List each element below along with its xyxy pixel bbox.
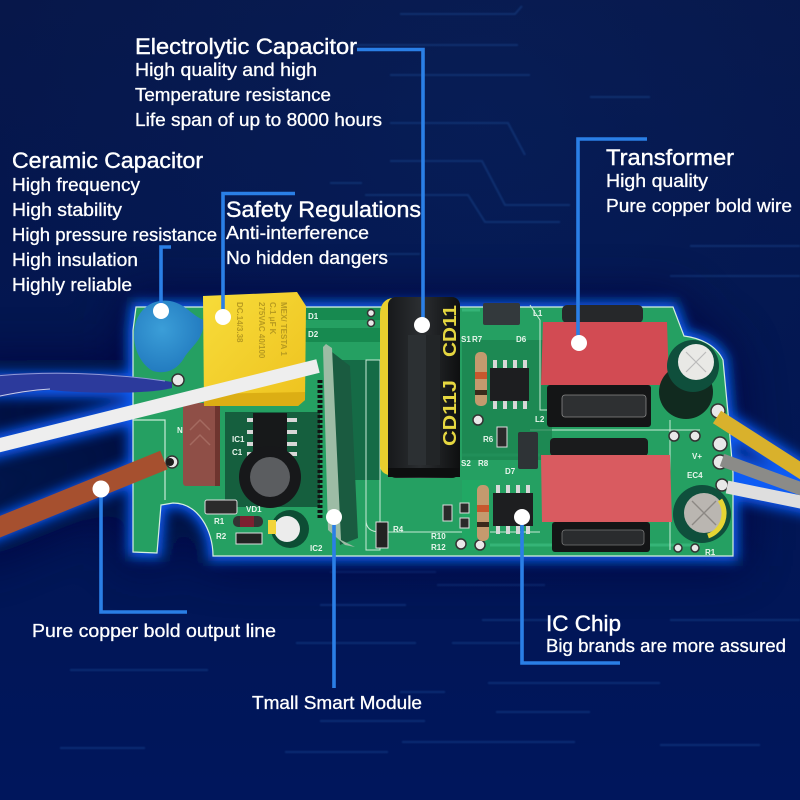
silkscreen labels: EC4 — [687, 471, 703, 480]
yellow safety capacitor: 275VAC 40/100 — [257, 302, 266, 359]
callout line: transformer — [571, 139, 647, 351]
callout line: electrolytic capacitor — [357, 50, 430, 333]
solder pads — [166, 310, 728, 552]
silkscreen labels: R1 — [214, 517, 225, 526]
inductor coil — [239, 446, 301, 508]
yellow safety capacitor: DC.14/3.38 — [235, 302, 244, 343]
callout line: smart module — [326, 509, 342, 688]
output capacitor top — [659, 340, 719, 419]
brown output wire — [0, 458, 174, 543]
text block: ceramic capacitor: High insulation — [12, 250, 138, 270]
main electrolytic capacitor: CD11J — [440, 380, 460, 446]
glow halo behind board and wires — [0, 307, 800, 556]
text block: smart module: Tmall Smart Module — [252, 693, 422, 713]
text block: ceramic capacitor: Highly reliable — [12, 275, 132, 295]
silkscreen labels: R4 — [393, 525, 404, 534]
text block: transformer: High quality — [606, 171, 708, 191]
silkscreen labels: D6 — [516, 335, 527, 344]
silkscreen labels: D1 — [308, 312, 319, 321]
silkscreen labels: R12 — [431, 543, 446, 552]
fuse — [183, 403, 220, 486]
silkscreen labels: IC2 — [310, 544, 323, 553]
text block: safety regulations: Safety Regulations — [226, 197, 421, 222]
silkscreen labels: R2 — [216, 532, 227, 541]
callout line: IC chip — [514, 509, 620, 663]
text block: transformer: Transformer — [606, 145, 734, 170]
small SMD parts — [205, 427, 507, 548]
silkscreen labels: R7 — [472, 335, 483, 344]
silkscreen labels: S1 — [461, 335, 471, 344]
silkscreen labels: R8 — [478, 459, 489, 468]
silkscreen labels: L1 — [533, 309, 543, 318]
text block: ceramic capacitor: High frequency — [12, 175, 140, 195]
text block: electrolytic capacitor: Temperature resistance — [135, 85, 331, 105]
silkscreen labels: R6 — [483, 435, 494, 444]
output capacitor bottom — [673, 485, 731, 543]
callout line: safety regulations — [215, 194, 295, 325]
text block: safety regulations: No hidden dangers — [226, 248, 388, 268]
ceramic capacitor — [134, 301, 204, 372]
text block: ceramic capacitor — [12, 148, 217, 295]
silkscreen labels: N — [177, 426, 183, 435]
resistors and ICs — [475, 352, 533, 541]
text block: ceramic capacitor: Ceramic Capacitor — [12, 148, 203, 173]
callout line: copper output wire — [92, 480, 187, 612]
transformer 2 — [541, 438, 672, 552]
main electrolytic capacitor: CD11 — [440, 305, 460, 357]
silkscreen labels: V+ — [692, 452, 702, 461]
blue input wire — [0, 372, 172, 398]
silkscreen labels: D2 — [308, 330, 319, 339]
callout line: ceramic capacitor — [153, 247, 171, 319]
text block: electrolytic capacitor: Electrolytic Capacitor — [135, 34, 357, 59]
IC chip 1 under inductor — [247, 413, 297, 473]
text block: safety regulations — [226, 197, 421, 268]
yellow safety capacitor: C.1 μF K — [268, 302, 277, 335]
circuit board — [133, 303, 733, 557]
white input wire — [0, 366, 318, 455]
middle diode — [518, 432, 538, 469]
yellow safety capacitor — [203, 292, 306, 406]
text block: electrolytic capacitor: High quality and high — [135, 60, 317, 80]
silkscreen labels — [177, 309, 716, 557]
silkscreen labels: S2 — [461, 459, 471, 468]
main electrolytic capacitor — [380, 297, 460, 478]
silkscreen labels: L2 — [535, 415, 545, 424]
silkscreen labels: VD1 — [246, 505, 262, 514]
board copper traces and silkscreen — [133, 305, 700, 550]
yellow safety capacitor: MEX/ TESTA 1 — [279, 302, 288, 356]
text block: IC chip: Big brands are more assured — [546, 636, 786, 656]
right side wires — [717, 417, 800, 510]
top diode — [483, 303, 520, 325]
smart module — [320, 344, 358, 547]
silkscreen labels: R1 — [705, 548, 716, 557]
text block: transformer: Pure copper bold wire — [606, 196, 792, 216]
text block: safety regulations: Anti-interference — [226, 223, 369, 243]
silkscreen labels: C1 — [232, 448, 243, 457]
silkscreen labels: R10 — [431, 532, 446, 541]
text block: ceramic capacitor: High stability — [12, 200, 122, 220]
silkscreen labels: D7 — [505, 467, 516, 476]
silkscreen labels: IC1 — [232, 435, 245, 444]
text block: IC chip: IC Chip — [546, 611, 621, 636]
text block: ceramic capacitor: High pressure resistance — [12, 225, 217, 245]
text block: IC chip — [546, 611, 786, 656]
text block: transformer — [606, 145, 792, 216]
text block: electrolytic capacitor — [135, 34, 382, 130]
transformer 1 — [541, 305, 669, 427]
small electrolytic capacitor — [268, 510, 309, 548]
text block: copper output line: Pure copper bold output line — [32, 621, 276, 641]
text block: electrolytic capacitor: Life span of up to 8000 hours — [135, 110, 382, 130]
